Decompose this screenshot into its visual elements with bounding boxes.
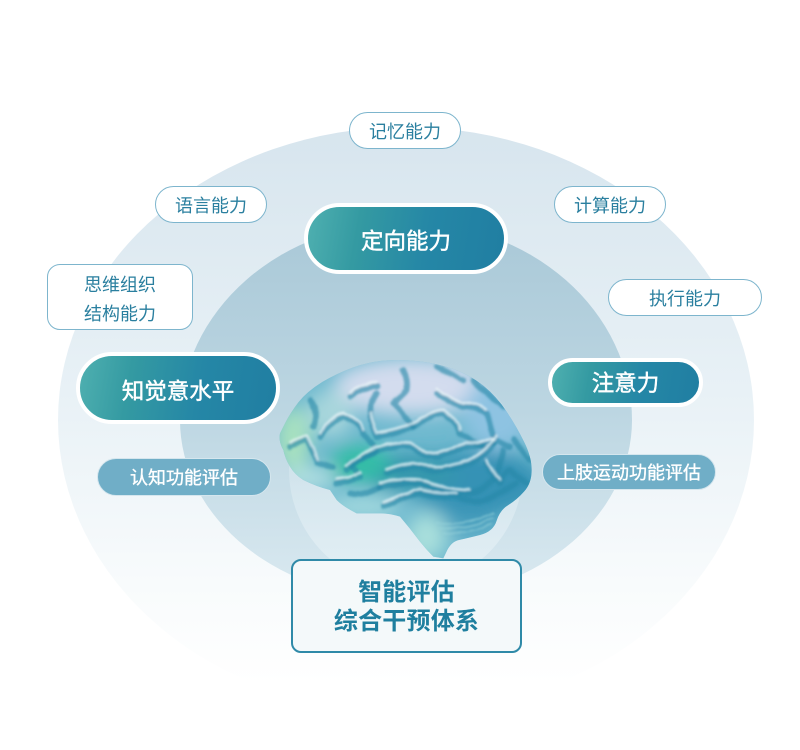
core glow circle xyxy=(289,353,523,587)
pill: 计算能力: 计算能力 xyxy=(574,196,646,216)
box: 智能评估综合干预体系 xyxy=(291,559,522,653)
box: 思维组织结构能力: 结构能力 xyxy=(84,304,156,324)
icon: brain xyxy=(270,350,543,570)
pill: 注意力: 注意力 xyxy=(592,371,659,396)
pill: 语言能力 xyxy=(155,186,267,223)
pill: 上肢运动功能评估: 上肢运动功能评估 xyxy=(557,463,701,483)
box: 智能评估综合干预体系: 综合干预体系 xyxy=(334,608,479,635)
pill: 知觉意水平: 知觉意水平 xyxy=(122,378,234,404)
pill: 认知功能评估: 认知功能评估 xyxy=(130,468,238,488)
box: 思维组织结构能力 xyxy=(47,264,193,330)
pill: 定向能力: 定向能力 xyxy=(361,228,451,254)
pill: 记忆能力: 记忆能力 xyxy=(369,122,441,142)
pill: 认知功能评估 xyxy=(97,458,271,496)
inner circle xyxy=(180,222,632,600)
pill: 执行能力: 执行能力 xyxy=(649,288,721,308)
outer circle xyxy=(58,127,754,713)
pill: 注意力 xyxy=(548,358,703,407)
pill: 知觉意水平 xyxy=(76,352,280,424)
pill: 记忆能力 xyxy=(349,112,461,149)
pill: 计算能力 xyxy=(554,186,666,223)
box: 思维组织结构能力: 思维组织 xyxy=(84,275,156,295)
pill: 语言能力: 语言能力 xyxy=(175,196,247,216)
pill: 上肢运动功能评估 xyxy=(542,454,716,490)
pill: 定向能力 xyxy=(304,203,508,274)
box: 智能评估综合干预体系: 智能评估 xyxy=(358,579,455,606)
pill: 执行能力 xyxy=(608,279,762,316)
background concentric circles and brain xyxy=(58,118,756,575)
